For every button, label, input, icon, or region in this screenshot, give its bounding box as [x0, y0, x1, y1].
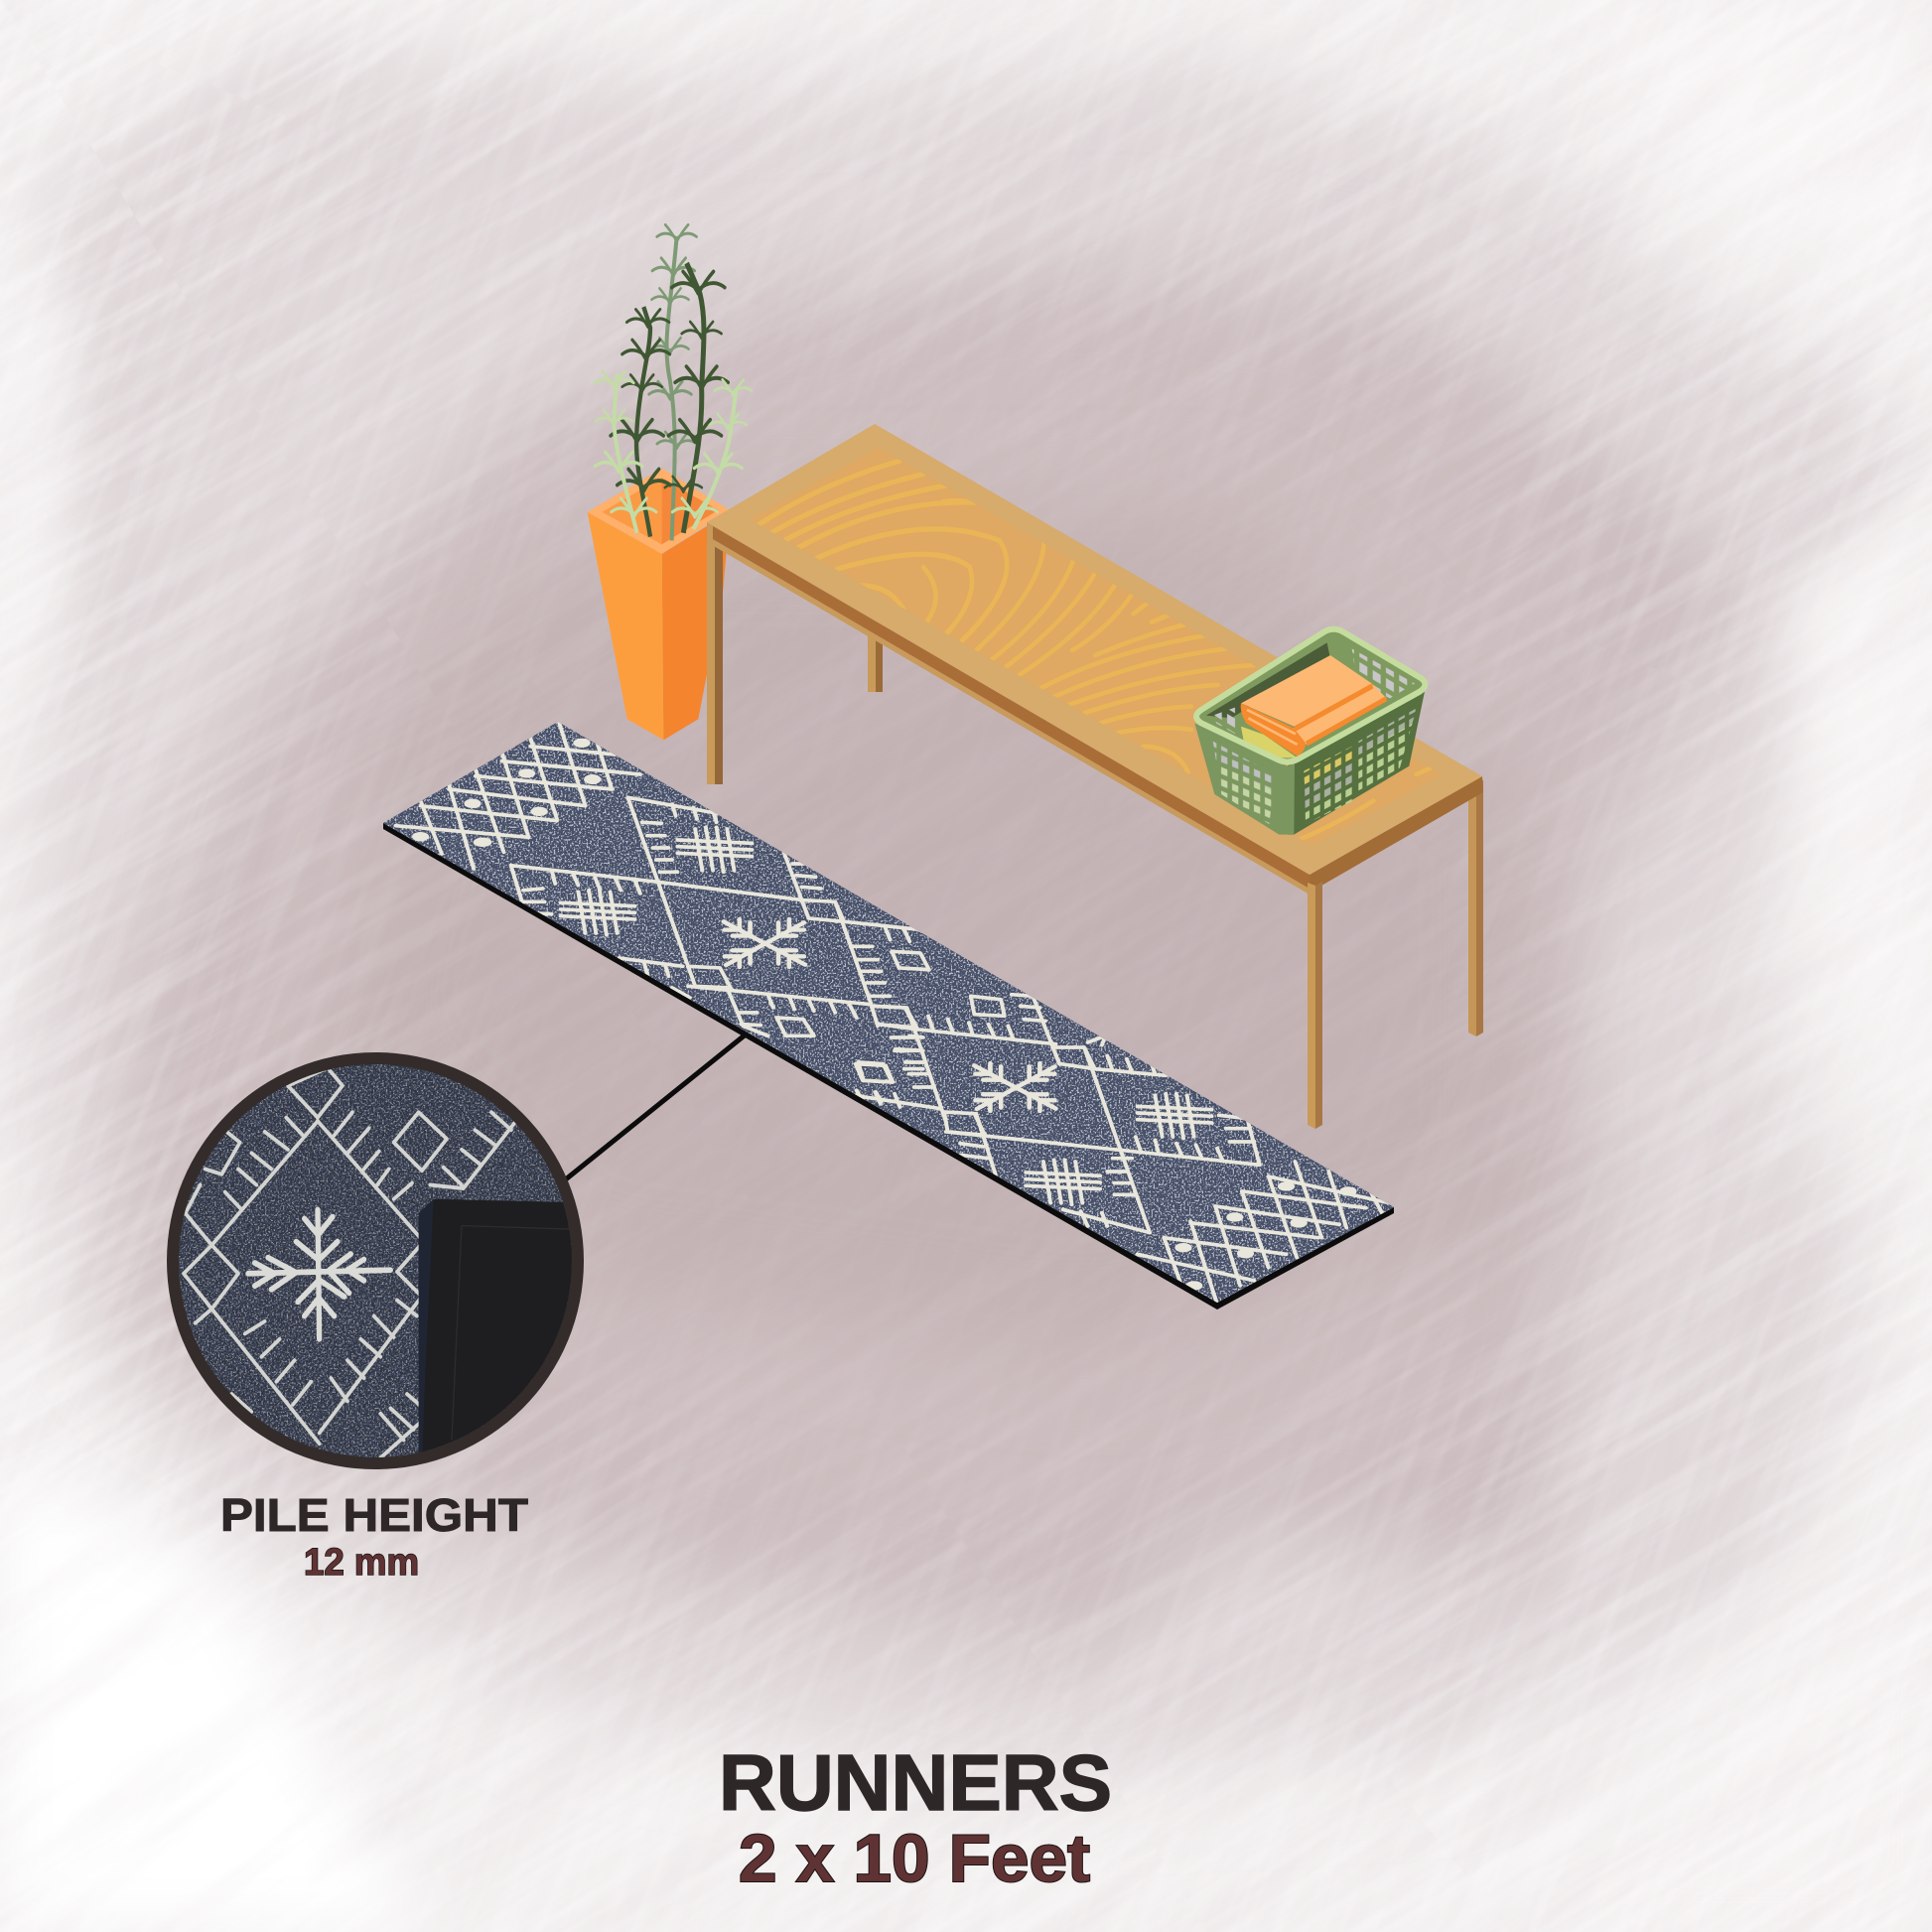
basket interior: [1196, 629, 1425, 761]
right leg: [1468, 780, 1483, 1036]
table: [707, 424, 1483, 1129]
towels: [1241, 655, 1387, 758]
title: runners: RUNNERS: [719, 1738, 1112, 1827]
detail circle: pile close-up: [167, 1052, 586, 1469]
wood grain: [758, 461, 1435, 839]
basket body left face: [1194, 723, 1288, 835]
rug pattern: first half: [396, 722, 929, 1102]
subtitle: size: 2 x 10 Feet: [739, 1821, 1090, 1896]
laundry basket with towels: [1194, 629, 1425, 835]
wood inset: [750, 448, 1442, 846]
connector line from rug to detail circle: [562, 1035, 746, 1182]
table apron: [707, 522, 1483, 895]
big diamond: [184, 1068, 447, 1444]
label: pile height: PILE HEIGHT: [220, 1489, 528, 1541]
diamond lines: [627, 797, 731, 988]
basket rim: [1196, 629, 1425, 761]
circle contents: [169, 1052, 586, 1469]
runner rug: [377, 715, 1400, 1311]
front leg: [1308, 882, 1322, 1129]
planter pot: [588, 469, 730, 740]
left leg: [707, 531, 723, 784]
plant: [594, 224, 752, 540]
basket body right face: [1279, 692, 1425, 835]
folded corner backing: [419, 1199, 586, 1465]
rug pattern: second half: [854, 995, 1389, 1304]
rug surface with pattern: [377, 715, 1400, 1311]
rug edge thickness: [383, 823, 1394, 1310]
snowflake: [248, 1209, 390, 1339]
end lattice: [1164, 1162, 1382, 1304]
circle ring: [167, 1052, 584, 1469]
value: 12 mm: 12 mm: [304, 1542, 419, 1584]
end lattice: [421, 722, 612, 869]
table top: [707, 424, 1482, 875]
back leg: [868, 631, 883, 692]
